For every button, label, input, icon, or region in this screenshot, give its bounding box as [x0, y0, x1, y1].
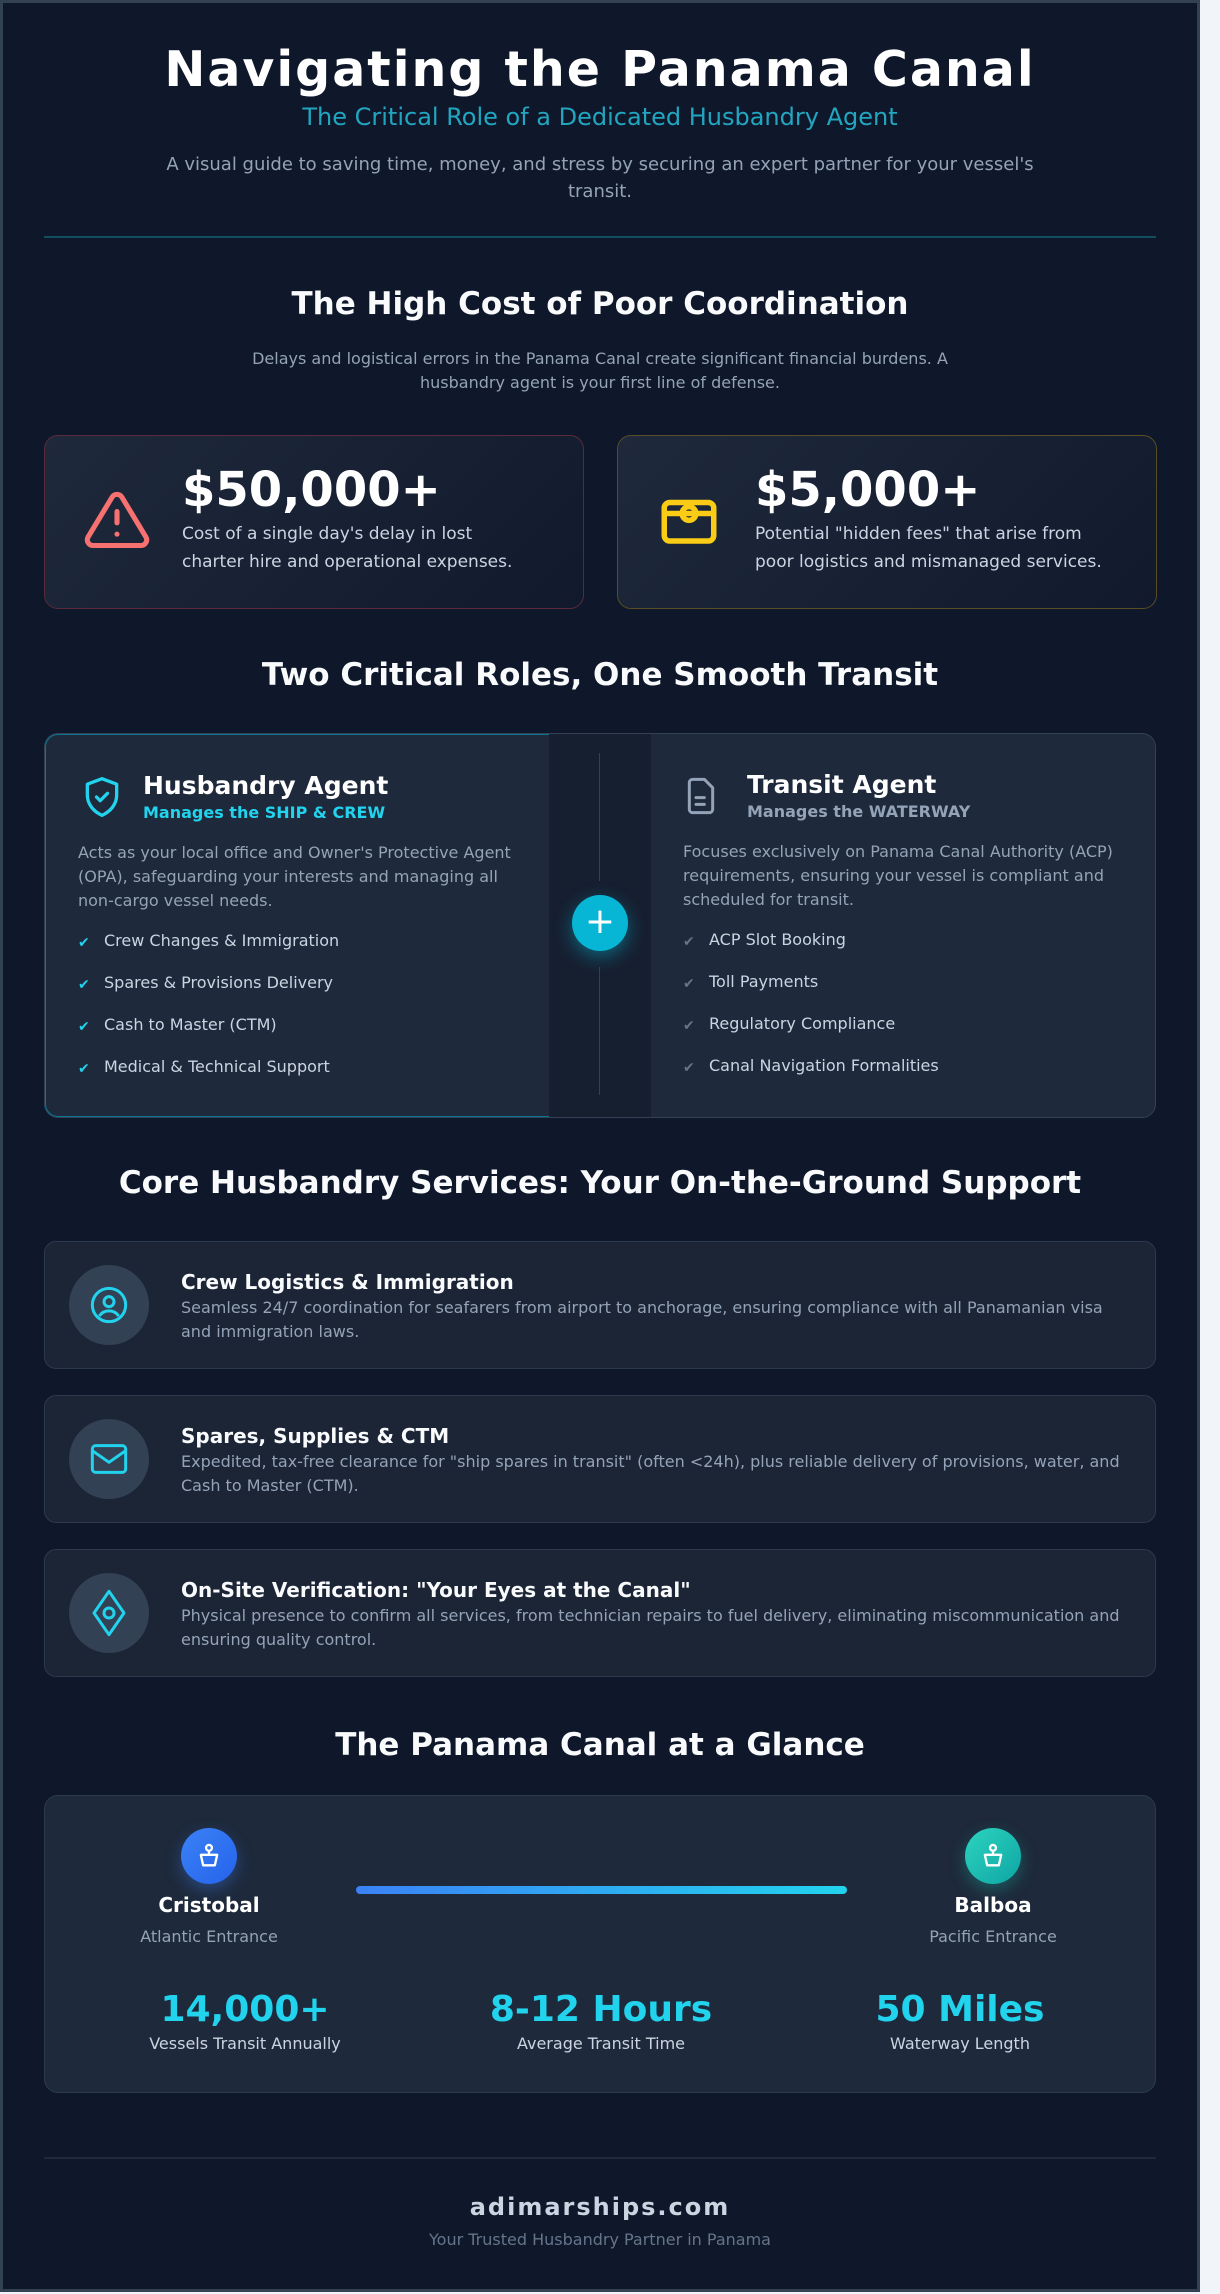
role title: Husbandry Agent: [143, 771, 388, 800]
service: verification: On-Site Verification: "Your Eyes at the Canal": [181, 1578, 691, 1602]
panel: husbandry agent: ✔: [78, 1019, 90, 1035]
stat text: Cost of a single day's delay in lost charter hire and operational expenses.: [182, 524, 512, 572]
label: balboa: Pacific Entrance: [929, 1927, 1057, 1946]
stat value: $50,000+: [182, 462, 441, 518]
label: cristobal: [140, 1893, 278, 1946]
panel: transit agent: ✔: [683, 934, 695, 950]
canal bar: [356, 1886, 847, 1894]
panel: glance: [44, 1795, 1156, 2093]
service: spares: Spares, Supplies & CTM: [181, 1424, 449, 1448]
icon: cristobal: [181, 1828, 237, 1884]
heading: core services: Core Husbandry Services: Your On-the-Ground Support: [119, 1165, 1081, 1201]
panel: husbandry agent: ✔: [78, 1061, 90, 1077]
stat: length: Waterway Length: [890, 2034, 1030, 2053]
panel: roles: [44, 733, 1156, 1118]
role sub: Manages the WATERWAY: [747, 802, 970, 821]
text: high cost intro: Delays and logistical errors in the Panama Canal create significant financial burdens. A husbandry agent is your first line of defense.: [252, 349, 948, 392]
checklist: [78, 931, 339, 1077]
icon: balboa: [965, 1828, 1021, 1884]
service: crew: [44, 1241, 1156, 1369]
stat: time: [490, 1989, 712, 2053]
title: Navigating the Panama Canal: [164, 41, 1036, 98]
divider column: [549, 733, 651, 1120]
panel: transit agent: Toll Payments: [709, 972, 818, 991]
role desc: Acts as your local office and Owner's Protective Agent (OPA), safeguarding your interests and managing all non-cargo vessel needs.: [78, 843, 511, 910]
stat text: Potential "hidden fees" that arise from poor logistics and mismanaged services.: [755, 524, 1102, 572]
footer tagline: Your Trusted Husbandry Partner in Panama: [429, 2230, 771, 2249]
panel: husbandry agent: Cash to Master (CTM): [104, 1015, 277, 1034]
role title: Transit Agent: [747, 770, 936, 799]
intro text: A visual guide to saving time, money, and stress by securing an expert partner for your vessel's transit.: [166, 154, 1034, 202]
icon: document: [688, 778, 714, 814]
stat: length: 50 Miles: [876, 1989, 1044, 2030]
service: spares: Expedited, tax-free clearance for "ship spares in transit" (often <24h), plus reliable delivery of provisions, water, and Cash to Master (CTM).: [181, 1452, 1120, 1495]
panel: husbandry agent: ✔: [78, 977, 90, 993]
subtitle: The Critical Role of a Dedicated Husbandry Agent: [302, 103, 898, 131]
heading: glance: The Panama Canal at a Glance: [335, 1727, 865, 1763]
label: balboa: [929, 1893, 1057, 1946]
footer domain: adimarships.com: [470, 2193, 730, 2221]
stat: vessels: 14,000+: [160, 1989, 330, 2030]
role sub: Manages the SHIP & CREW: [143, 803, 385, 822]
panel: transit agent: Regulatory Compliance: [709, 1014, 895, 1033]
panel: husbandry agent: Medical & Technical Support: [104, 1057, 330, 1076]
panel: transit agent: ✔: [683, 976, 695, 992]
panel: transit agent: ACP Slot Booking: [709, 930, 846, 949]
stat value: $5,000+: [755, 462, 980, 518]
icon: diamond eye: [69, 1573, 149, 1653]
service: verification: Physical presence to confirm all services, from technician repairs to fuel delivery, eliminating miscommunication and ensuring quality control.: [181, 1606, 1120, 1649]
panel: transit agent: [683, 770, 1113, 1076]
label: balboa: Balboa: [954, 1893, 1032, 1917]
stat: length: [876, 1989, 1044, 2053]
icon: warning: [84, 492, 150, 548]
stat: time: 8-12 Hours: [490, 1989, 712, 2030]
panel: husbandry agent: Crew Changes & Immigration: [104, 931, 339, 950]
panel: transit agent: ✔: [683, 1060, 695, 1076]
stat: time: Average Transit Time: [517, 2034, 685, 2053]
card: delay cost: [44, 435, 584, 609]
panel: husbandry agent: Spares & Provisions Delivery: [104, 973, 333, 992]
panel: transit agent: ✔: [683, 1018, 695, 1034]
icon: user: [69, 1265, 149, 1345]
heading: high cost: The High Cost of Poor Coordination: [292, 286, 908, 322]
label: cristobal: Atlantic Entrance: [140, 1927, 278, 1946]
stat: vessels: Vessels Transit Annually: [149, 2034, 341, 2053]
service: verification: [44, 1549, 1156, 1677]
role desc: Focuses exclusively on Panama Canal Authority (ACP) requirements, ensuring your vessel is compliant and scheduled for transit.: [683, 842, 1113, 909]
icon: wallet: [662, 500, 716, 544]
icon: shield: [86, 777, 118, 817]
service: crew: Seamless 24/7 coordination for seafarers from airport to anchorage, ensuring compliance with all Panamanian visa and immigration laws.: [181, 1298, 1103, 1341]
icon: plus: [572, 895, 628, 951]
icon: envelope: [69, 1419, 149, 1499]
service: crew: Crew Logistics & Immigration: [181, 1270, 514, 1294]
icon: plus: +: [585, 901, 615, 942]
panel: husbandry agent: [44, 733, 549, 1118]
service: spares: [44, 1395, 1156, 1523]
panel: transit agent: Canal Navigation Formalities: [709, 1056, 939, 1075]
heading: roles: Two Critical Roles, One Smooth Transit: [262, 657, 938, 693]
label: cristobal: Cristobal: [158, 1893, 260, 1917]
checklist: [683, 930, 939, 1076]
card: hidden fees: [617, 435, 1157, 609]
stat: vessels: [149, 1989, 341, 2053]
panel: husbandry agent: ✔: [78, 935, 90, 951]
